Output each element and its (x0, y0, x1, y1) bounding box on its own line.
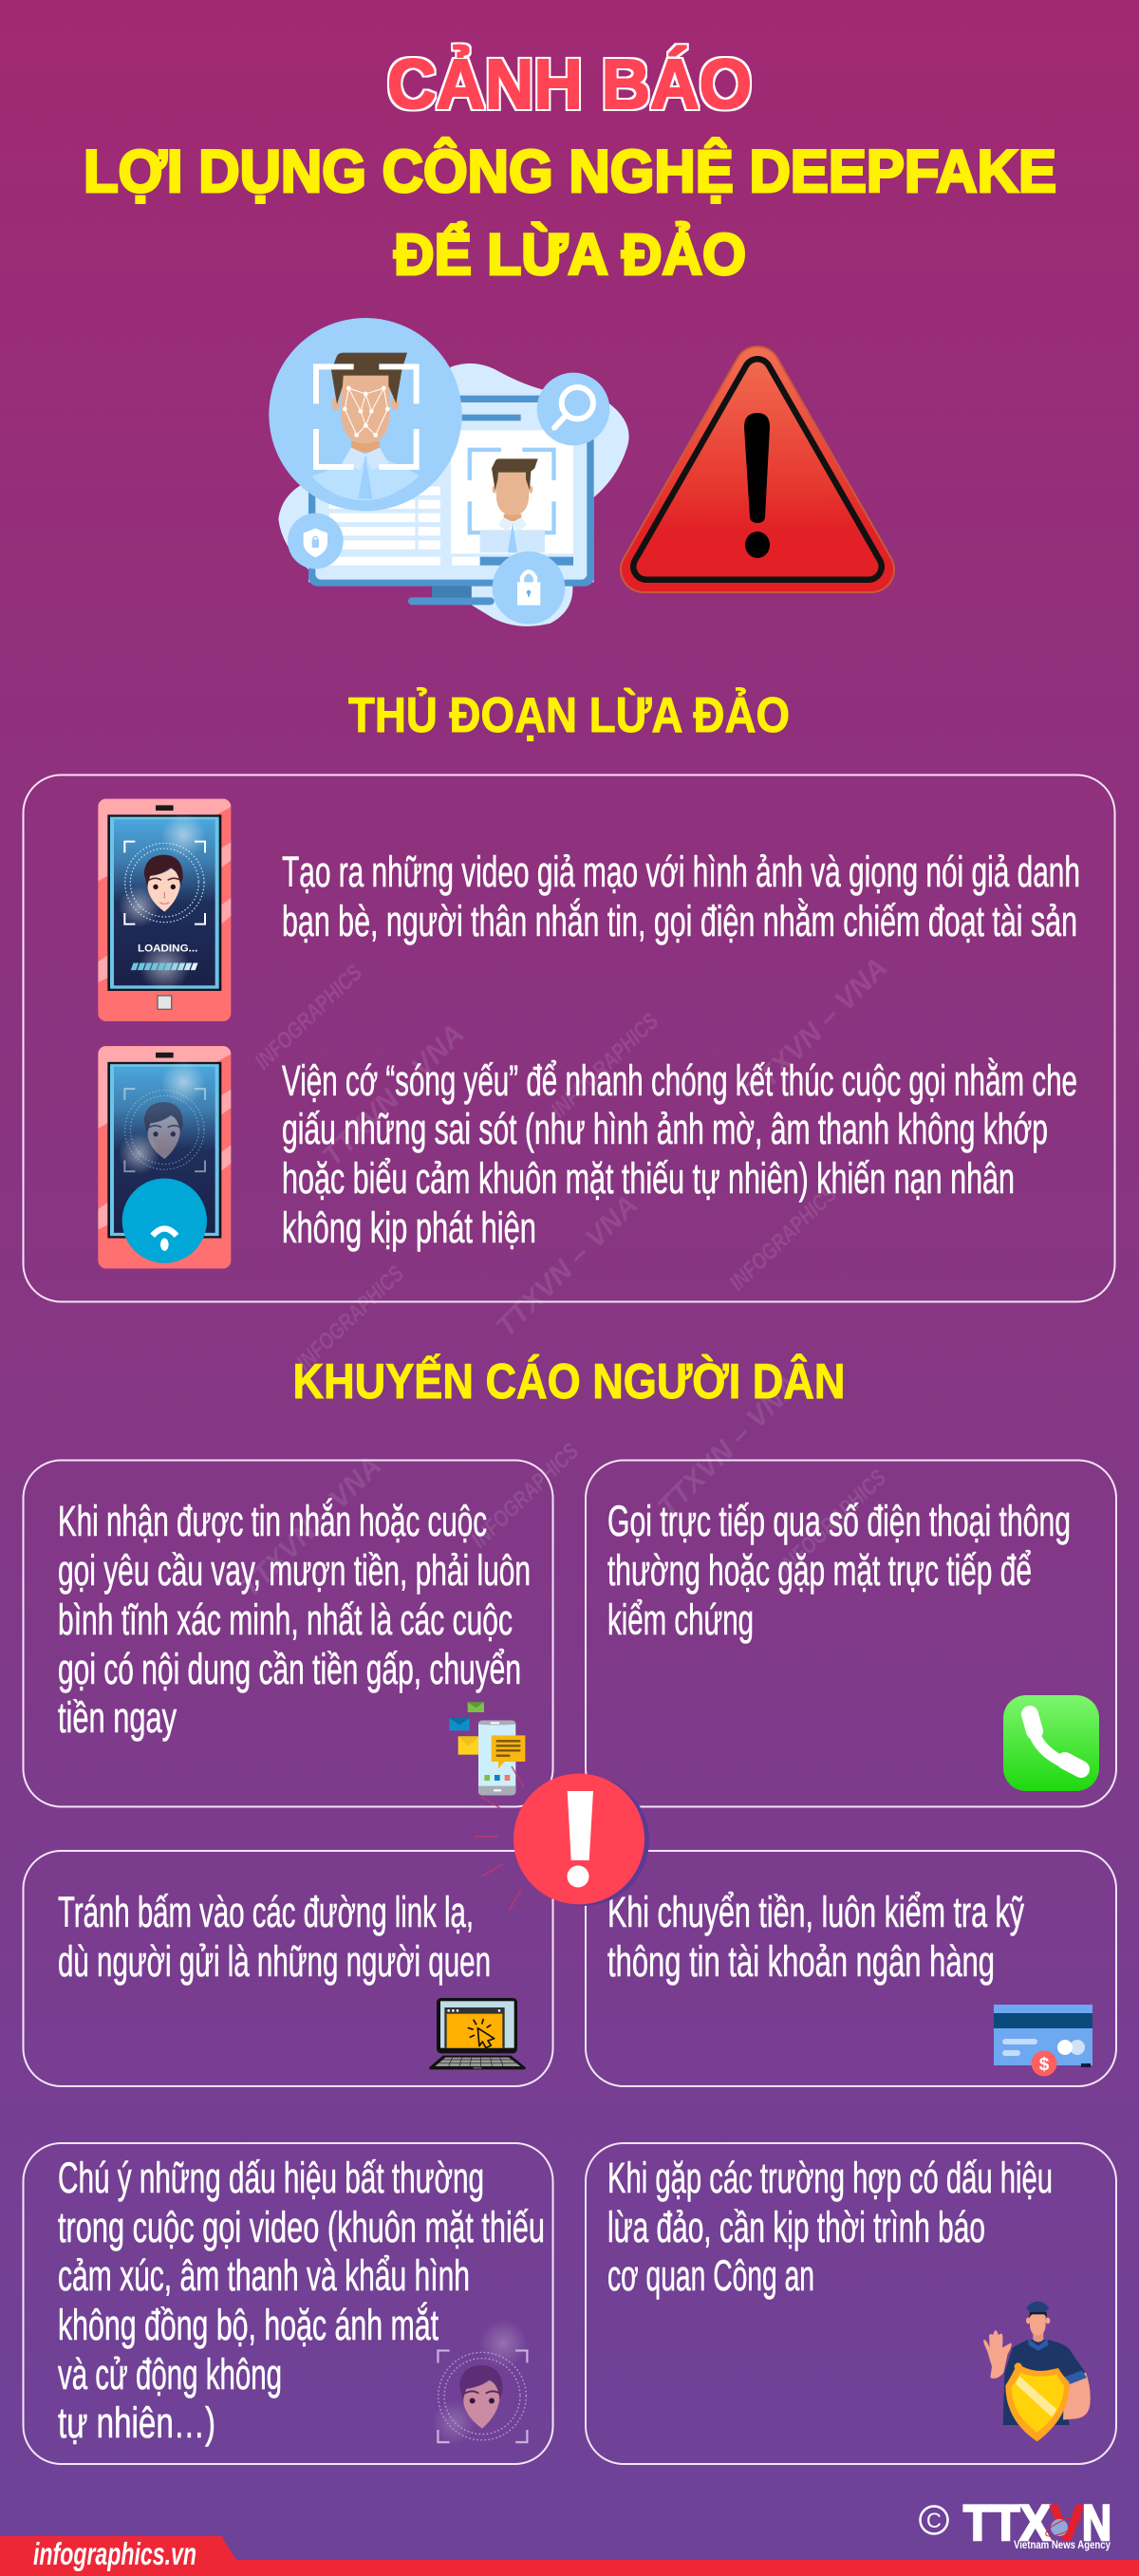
watermarks: INFOGRAPHICS (724, 1181, 842, 1296)
card: verify requests: Khi nhận được tin nhắn hoặc cuộc (58, 1497, 487, 1545)
card: verify requests: tiền ngay (58, 1693, 177, 1742)
shield (1005, 2363, 1070, 2441)
title (84, 45, 1056, 287)
text: weak signal excuse (282, 1056, 1077, 1252)
copyright logo: TTXVN: TTX (963, 2495, 1051, 2551)
watermarks (234, 952, 894, 1604)
watermarks: INFOGRAPHICS (466, 1438, 584, 1553)
card: video call signs: trong cuộc gọi video (khuôn mặt thiếu (58, 2203, 545, 2251)
card: video call signs (23, 2143, 552, 2464)
card: check bank account (586, 1851, 1116, 2086)
card: call directly: kiểm chứng (607, 1596, 754, 1644)
card: video call signs: cảm xúc, âm thanh và khẩu hình (58, 2251, 470, 2300)
icon: messages on phone (449, 1702, 525, 1795)
card: call directly (586, 1460, 1116, 1807)
icon: phone weak signal (98, 1046, 231, 1268)
panel: scam tactics (23, 775, 1114, 1302)
card: strange links: Tránh bấm vào các đường link lạ, (58, 1888, 474, 1936)
watermarks: INFOGRAPHICS (250, 960, 367, 1074)
icon: phone scanning face (98, 799, 231, 1021)
card: verify requests: gọi có nội dung cần tiền gấp, chuyển (58, 1645, 521, 1693)
illustration: face recognition monitor (269, 318, 629, 626)
blob background (278, 364, 629, 626)
watermarks: TTXVN – VNA (491, 1189, 644, 1343)
icon: padlock (493, 551, 565, 625)
watermarks: INFOGRAPHICS (546, 1008, 663, 1123)
card: strange links (23, 1851, 552, 2086)
icon: credit card (994, 2005, 1092, 2077)
title line: deepfake: LỢI DỤNG CÔNG NGHỆ DEEPFAKE (84, 138, 1056, 205)
alert rays (474, 1766, 524, 1911)
copyright logo: TTXVN: N (1082, 2495, 1111, 2551)
loading label: LOADING... (138, 943, 197, 955)
footer band (0, 2536, 1139, 2576)
watermarks: TTXVN – VNA (740, 952, 894, 1106)
title line: warning: CẢNH BÁO (387, 45, 752, 123)
card: verify requests: bình tĩnh xác minh, nhất là các cuộc (58, 1596, 513, 1644)
icon: face scan (431, 2319, 528, 2445)
footer band: infographics.vn (33, 2536, 196, 2571)
heading: recommendations: KHUYẾN CÁO NGƯỜI DÂN (292, 1353, 845, 1409)
title line: scam: ĐỂ LỪA ĐẢO (394, 222, 746, 287)
copyright logo: TTXVN: V (1050, 2495, 1084, 2551)
icon: dollar coin: $ (1039, 2055, 1050, 2075)
copyright logo: TTXVN (921, 2495, 1111, 2551)
monitor (308, 396, 594, 605)
icon: magnifier (537, 373, 609, 445)
big circle with scanned face (269, 318, 462, 511)
icon: police officer with shield (983, 2302, 1091, 2441)
watermarks: INFOGRAPHICS (774, 1465, 891, 1579)
card: video call signs: không đồng bộ, hoặc ánh mắt (58, 2301, 439, 2349)
heading: scam tactics: THỦ ĐOẠN LỪA ĐẢO (348, 687, 790, 743)
icon: green phone app (1003, 1695, 1099, 1791)
icon: shield (288, 513, 344, 569)
copyright logo: TTXVN: Vietnam News Agency (1014, 2538, 1111, 2551)
text: weak signal excuse: không kịp phát hiện (282, 1204, 536, 1252)
card: verify requests (23, 1460, 552, 1807)
small person on screen (468, 448, 556, 552)
card: report to police: cơ quan Công an (607, 2251, 814, 2300)
card: video call signs: Chú ý những dấu hiệu bất thường (58, 2154, 484, 2202)
alert badge (474, 1766, 649, 1911)
icon: warning triangle (644, 369, 871, 569)
card: strange links: dù người gửi là những người quen (58, 1937, 491, 1986)
card: video call signs: tự nhiên…) (58, 2399, 215, 2447)
watermarks: INFOGRAPHICS (291, 1260, 409, 1375)
icon: laptop with cursor (429, 1998, 526, 2069)
card: video call signs: và cử động không (58, 2350, 282, 2399)
watermarks: TTXVN – VNA (652, 1370, 806, 1523)
watermarks: TTXVN – VNA (317, 1018, 471, 1172)
card: verify requests: gọi yêu cầu vay, mượn tiền, phải luôn (58, 1546, 531, 1595)
watermarks: TTXVN – VNA (234, 1450, 388, 1604)
copyright logo: TTXVN: C (926, 2509, 942, 2532)
card: report to police (586, 2143, 1116, 2464)
text: fake videos (282, 848, 1080, 945)
